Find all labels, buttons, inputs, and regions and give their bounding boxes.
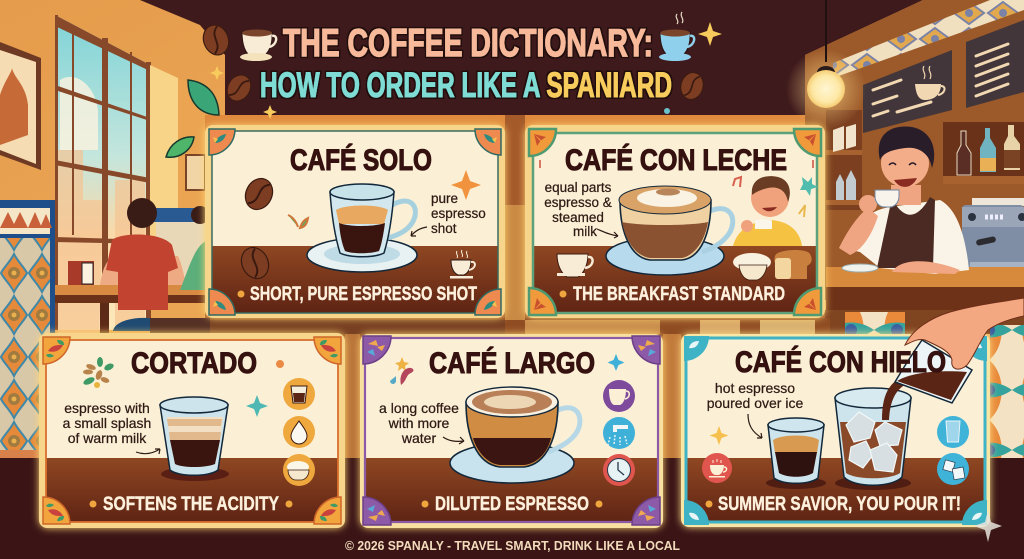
leaves — [166, 80, 219, 190]
panel: cafe con hielo — [681, 298, 1024, 527]
icon: ice cubes — [937, 453, 969, 485]
pendant lamp — [786, 0, 866, 129]
panel: cafe solo — [205, 125, 505, 318]
glass with ice and pour — [835, 378, 911, 490]
annotation: espresso with — [64, 400, 150, 416]
annotation: pure — [431, 191, 458, 206]
icon: steaming cup — [450, 250, 475, 278]
heading: CAFÉ CON HIELO — [735, 345, 946, 379]
heading: CAFÉ CON LECHE — [565, 143, 787, 177]
title decorations: beans, cups, sparkles — [199, 12, 722, 119]
panel: cortado — [39, 333, 345, 528]
icon: leaf cluster — [82, 357, 115, 388]
heading: CAFÉ LARGO — [429, 346, 595, 380]
icon: coffee beans and leaf — [236, 170, 481, 283]
cortado glass — [160, 397, 229, 481]
annotation: equal parts — [545, 180, 611, 195]
sparkle — [710, 426, 728, 445]
footer text: DILUTED ESPRESSO — [435, 494, 589, 515]
footer credit: © 2026 SPANALY - TRAVEL SMART, DRINK LIKE A LOCAL — [345, 539, 680, 553]
annotation: with more — [388, 415, 450, 431]
painting on wall — [0, 42, 41, 170]
panel: cafe con leche — [525, 125, 825, 318]
man seated at table — [55, 198, 209, 333]
footer text: SHORT, PURE ESPRESSO SHOT — [250, 284, 477, 305]
annotation: milk — [573, 224, 597, 239]
footer text: SOFTENS THE ACIDITY — [103, 494, 279, 515]
sparkle — [608, 354, 624, 371]
accent dot — [276, 360, 284, 368]
bottom dark band — [0, 458, 1024, 559]
footer text: SUMMER SAVIOR, YOU POUR IT! — [718, 494, 961, 515]
heading: CAFÉ SOLO — [290, 143, 432, 177]
sparkle near corner — [974, 510, 1002, 542]
icon: clock — [603, 454, 635, 486]
annotation: hot espresso — [715, 380, 795, 396]
footer dot — [238, 290, 244, 298]
strip between rows — [0, 115, 1024, 458]
bar shelves — [805, 0, 1024, 334]
latte cup on saucer — [606, 186, 733, 275]
boy drinking coffee — [540, 160, 818, 246]
title line 1: THE COFFEE DICTIONARY: — [283, 22, 653, 65]
annotation: steamed — [552, 210, 604, 225]
icon: water glass — [937, 416, 969, 448]
arrow — [443, 437, 464, 444]
largo cup on saucer — [450, 387, 580, 483]
window — [55, 15, 205, 340]
espresso glass cup on saucer — [307, 184, 417, 272]
icon: cup — [603, 380, 635, 412]
arrow — [748, 414, 762, 438]
arrow — [411, 227, 427, 236]
title line 2: HOW TO ORDER LIKE A SPANIARD — [260, 66, 672, 105]
icon: milk drop — [283, 416, 315, 448]
tile wall — [0, 200, 207, 460]
footer text: THE BREAKFAST STANDARD — [573, 284, 785, 305]
annotation: espresso — [431, 206, 486, 221]
footer dots — [422, 500, 602, 508]
arrow — [597, 229, 618, 238]
annotation: of warm milk — [68, 430, 147, 446]
ceiling dark band — [140, 0, 923, 115]
heading: CORTADO — [131, 347, 257, 380]
icon: small glass — [283, 378, 315, 410]
annotation: shot — [431, 221, 457, 236]
footer dot — [706, 500, 712, 508]
barista — [839, 127, 969, 274]
icon: hot cup — [702, 453, 732, 483]
panel: cafe largo — [360, 334, 663, 528]
footer dots — [90, 500, 292, 508]
icon: cup — [557, 254, 593, 277]
arrow — [136, 449, 160, 454]
annotation: water — [401, 430, 436, 446]
icon: decorative star and swirl — [390, 357, 413, 385]
annotation: a long coffee — [379, 400, 459, 416]
icon: whipped milk and bread — [733, 250, 812, 280]
small espresso glass — [766, 418, 826, 489]
footer dot — [560, 290, 566, 298]
title — [260, 22, 672, 105]
annotation: poured over ice — [707, 395, 803, 411]
sparkle — [246, 395, 268, 417]
annotation: espresso & — [544, 195, 612, 210]
icon: water tap — [603, 417, 635, 449]
icon: foam cup — [283, 454, 315, 486]
annotation: a small splash — [63, 415, 151, 431]
hand pouring from jug — [895, 298, 1024, 403]
